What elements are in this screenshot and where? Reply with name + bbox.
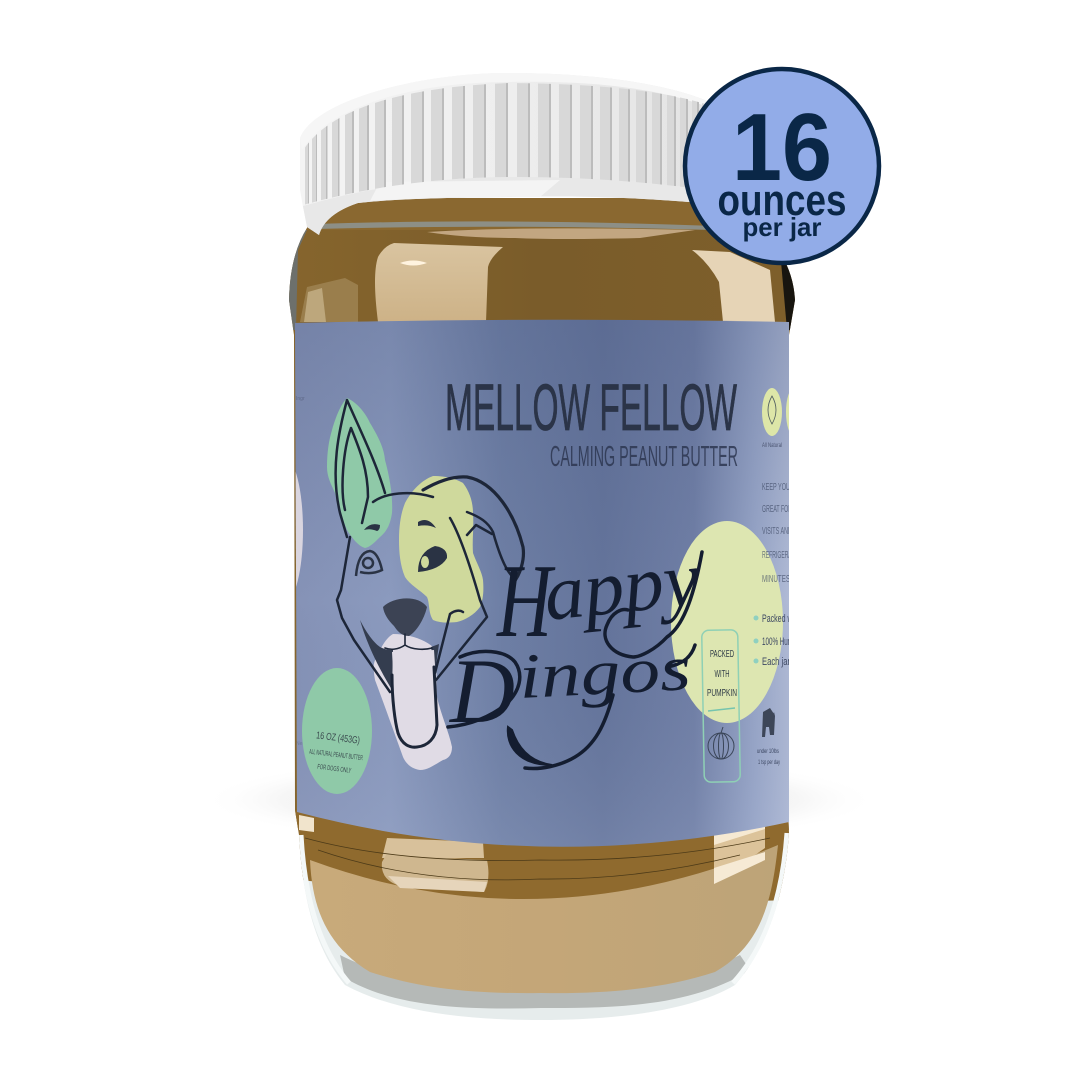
icon: small dog serving guide: 1 tsp per day xyxy=(758,760,780,766)
weight text: ALL NATURAL PEANUT BUTTER xyxy=(309,749,363,762)
weight text: 16 OZ (453G) xyxy=(316,730,361,747)
dog mouth xyxy=(360,620,439,690)
callout: packed with pumpkin: WITH xyxy=(714,669,730,680)
logo: Happy Dingos: D xyxy=(448,640,515,742)
lower dark band xyxy=(294,810,800,905)
badges: natural: All Natural xyxy=(762,443,782,449)
lower highlights xyxy=(382,838,484,858)
blob: bottom-left green xyxy=(302,668,372,794)
weight text xyxy=(309,732,363,773)
blob: right yellow xyxy=(671,521,783,723)
lid xyxy=(300,73,724,235)
directions text xyxy=(762,483,789,582)
logo: Happy Dingos: ingos xyxy=(517,632,692,712)
lid ribs xyxy=(305,83,704,204)
badge: 16 ounces per jar: ounces xyxy=(718,176,846,225)
left edge label text xyxy=(296,396,304,745)
directions text: REFRIGERATE xyxy=(762,550,798,561)
jar glass and contents xyxy=(280,190,800,1030)
icon: small dog serving guide xyxy=(757,708,780,766)
label: CALMING PEANUT BUTTER xyxy=(550,441,738,473)
weight text: FOR DOGS ONLY xyxy=(317,764,352,775)
callout: packed with pumpkin: PACKED xyxy=(710,649,734,660)
directions text: KEEP YOUR xyxy=(762,482,794,493)
jar xyxy=(267,73,802,1030)
callout: packed with pumpkin: PUMPKIN xyxy=(707,688,737,699)
lower peanut butter xyxy=(310,845,778,993)
bullet list: Each jar xyxy=(762,656,790,668)
bullet list xyxy=(754,614,789,668)
icon: pumpkin xyxy=(708,727,734,759)
badge: 16 ounces per jar: per jar xyxy=(742,212,822,242)
logo: Happy Dingos: appy xyxy=(540,534,703,637)
dog illustration xyxy=(327,398,523,770)
floor shadow xyxy=(200,755,880,845)
logo: Happy Dingos: H xyxy=(496,542,556,659)
product scene xyxy=(278,66,882,1020)
logo swashes xyxy=(605,552,702,667)
highlights on shoulder xyxy=(375,243,503,322)
label xyxy=(295,320,789,847)
heading: MELLOW FELLOW xyxy=(445,370,737,444)
logo: Happy Dingos xyxy=(448,534,703,769)
badge: 16 ounces per jar xyxy=(685,69,879,263)
badges: natural xyxy=(762,388,789,447)
callout: packed with pumpkin xyxy=(702,630,740,782)
left edge label text: Ingr xyxy=(296,396,305,402)
glass base shading xyxy=(340,955,750,1009)
directions text: VISITS AND xyxy=(762,526,792,537)
left edge label text: Net xyxy=(296,741,304,747)
bullet list: 100% Human xyxy=(762,636,800,648)
directions text: MINUTES xyxy=(762,574,790,585)
badge: 16 ounces per jar: 16 xyxy=(732,94,832,201)
bullet list: Packed with xyxy=(762,613,800,625)
icon: small dog serving guide: under 10lbs xyxy=(757,749,779,755)
directions text: GREAT FOR xyxy=(762,504,792,515)
